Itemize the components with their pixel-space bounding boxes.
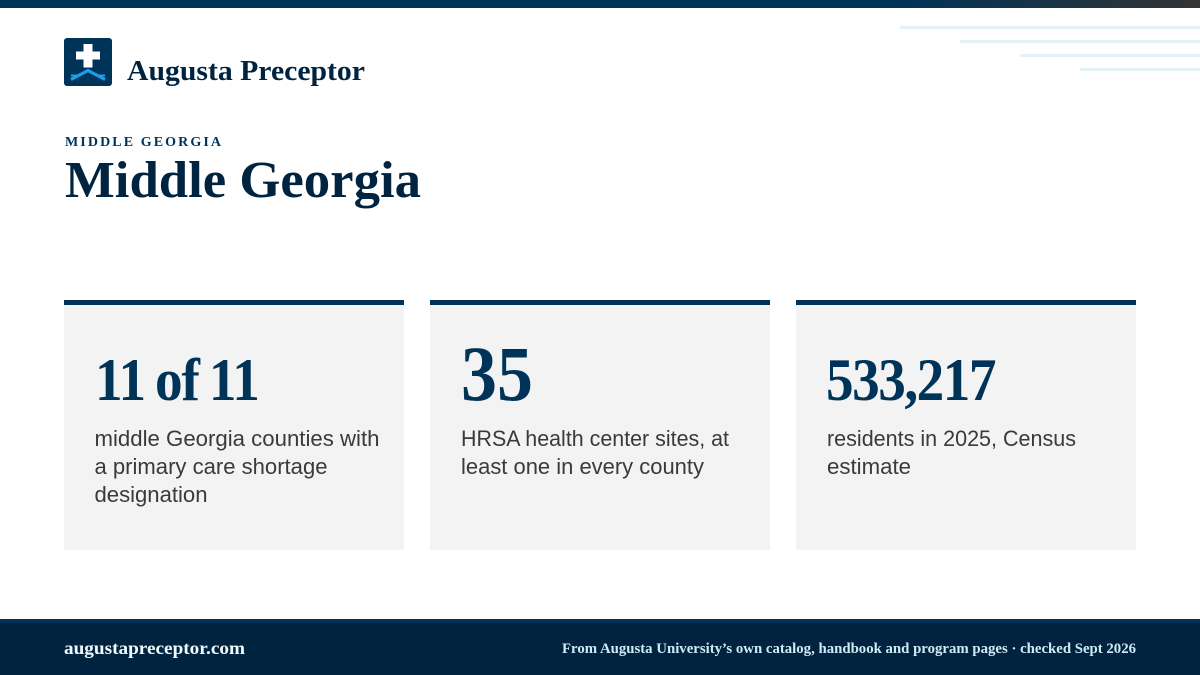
description: HRSA health center sites, at bbox=[461, 426, 730, 451]
description bbox=[461, 426, 730, 479]
description: middle Georgia counties with bbox=[94, 426, 380, 451]
footer website: augustapreceptor.com bbox=[64, 638, 245, 658]
decorative corner lines bbox=[900, 26, 1200, 71]
icon: medical cross and chevron bbox=[64, 38, 112, 86]
description bbox=[827, 426, 1076, 479]
description bbox=[94, 426, 380, 507]
footer bbox=[0, 619, 1200, 675]
top bar bbox=[0, 0, 1200, 8]
title: Middle Georgia bbox=[65, 152, 421, 209]
description: estimate bbox=[827, 454, 911, 479]
footer source note: From Augusta University’s own catalog, handbook and program pages · checked Sept 2026 bbox=[562, 641, 1136, 657]
logo bbox=[64, 38, 365, 87]
panel: health center sites stat bbox=[430, 300, 770, 550]
panel: residents stat bbox=[796, 300, 1136, 550]
brand name: Augusta Preceptor bbox=[127, 56, 365, 87]
description: residents in 2025, Census bbox=[827, 426, 1076, 451]
number: 35: 35 bbox=[461, 330, 533, 417]
number: 11 of 11: 11 of 11 bbox=[95, 348, 259, 414]
number: 533,217: 533,217 bbox=[826, 348, 996, 414]
description: least one in every county bbox=[461, 454, 705, 479]
eyebrow: MIDDLE GEORGIA bbox=[65, 135, 222, 150]
description: designation bbox=[94, 482, 208, 507]
description: a primary care shortage bbox=[94, 454, 328, 479]
panel: counties stat bbox=[64, 300, 404, 550]
